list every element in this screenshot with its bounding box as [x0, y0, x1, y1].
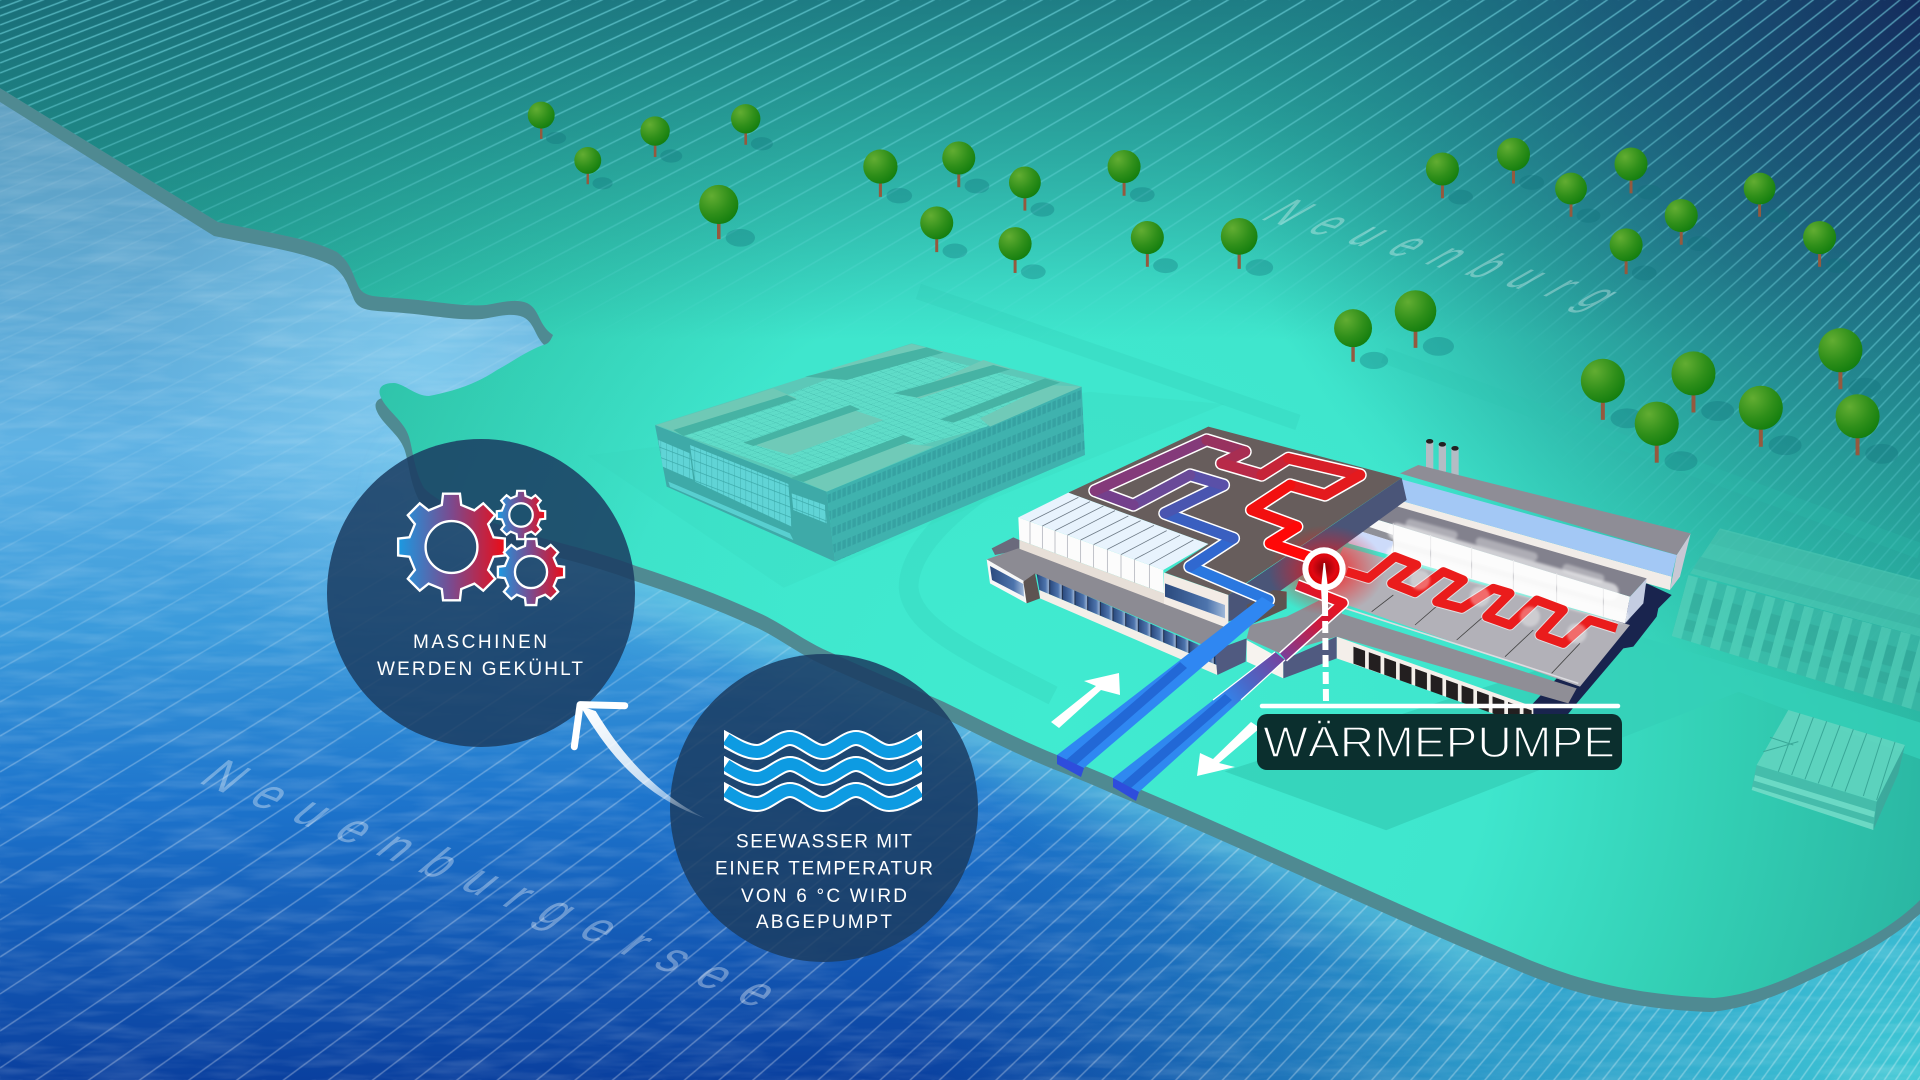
arrow: water flowing in: [1051, 673, 1120, 728]
factory: white steam block: [1348, 500, 1647, 623]
factory: west wing: [987, 427, 1407, 675]
building: factory with heat pump: [987, 427, 1691, 727]
arrow: curved from lake water to machines: [574, 705, 705, 818]
callout: Wärmepumpe label: WÄRMEPUMPE: [1263, 718, 1615, 767]
text: lake water pumped: EINER TEMPERATUR: [715, 858, 933, 880]
text: machines are cooled: WERDEN GEKÜHLT: [377, 659, 583, 680]
callout: Wärmepumpe label: [1257, 706, 1622, 770]
icon: water waves: [715, 734, 931, 804]
factory: low right roof: [1323, 547, 1630, 727]
factory: entrance block: [1215, 590, 1343, 678]
return pipe and heat pump marker: [1283, 547, 1346, 703]
text: lake water pumped: SEEWASSER MIT: [736, 832, 912, 852]
text: lake water pumped: VON 6 °C WIRD: [741, 886, 907, 907]
ground pipes to the lake: [1057, 597, 1285, 801]
label: Neuenburg: Neuenburg: [1247, 193, 1637, 315]
red heat pipe on steam block: [1347, 557, 1617, 643]
icon: gears: [398, 491, 564, 605]
cooling pipe on west roof: [1095, 440, 1360, 600]
building: left teal office block: [655, 343, 1085, 562]
steam over red pipe: [1410, 570, 1587, 643]
text: lake water pumped: ABGEPUMPT: [756, 912, 892, 933]
arrow: water flowing out: [1197, 722, 1260, 776]
factory: steam on slate roof: [1393, 523, 1622, 617]
building: right teal hall: [1672, 528, 1920, 712]
panel: machines are cooled: [327, 439, 635, 747]
text: machines are cooled: [377, 632, 583, 680]
trees: [528, 102, 1898, 471]
text: lake water pumped: [715, 832, 933, 933]
label: Neuenburgersee: Neuenburgersee: [188, 752, 792, 1016]
factory: navy base: [1530, 583, 1672, 727]
red glow around heat pump: [1268, 525, 1385, 615]
factory: chimneys: [1426, 439, 1459, 476]
panel: lake water pumped: [670, 654, 978, 962]
text: machines are cooled: MASCHINEN: [413, 632, 547, 653]
factory: rear hall: [1375, 465, 1691, 590]
building: right small block: [1752, 710, 1905, 830]
